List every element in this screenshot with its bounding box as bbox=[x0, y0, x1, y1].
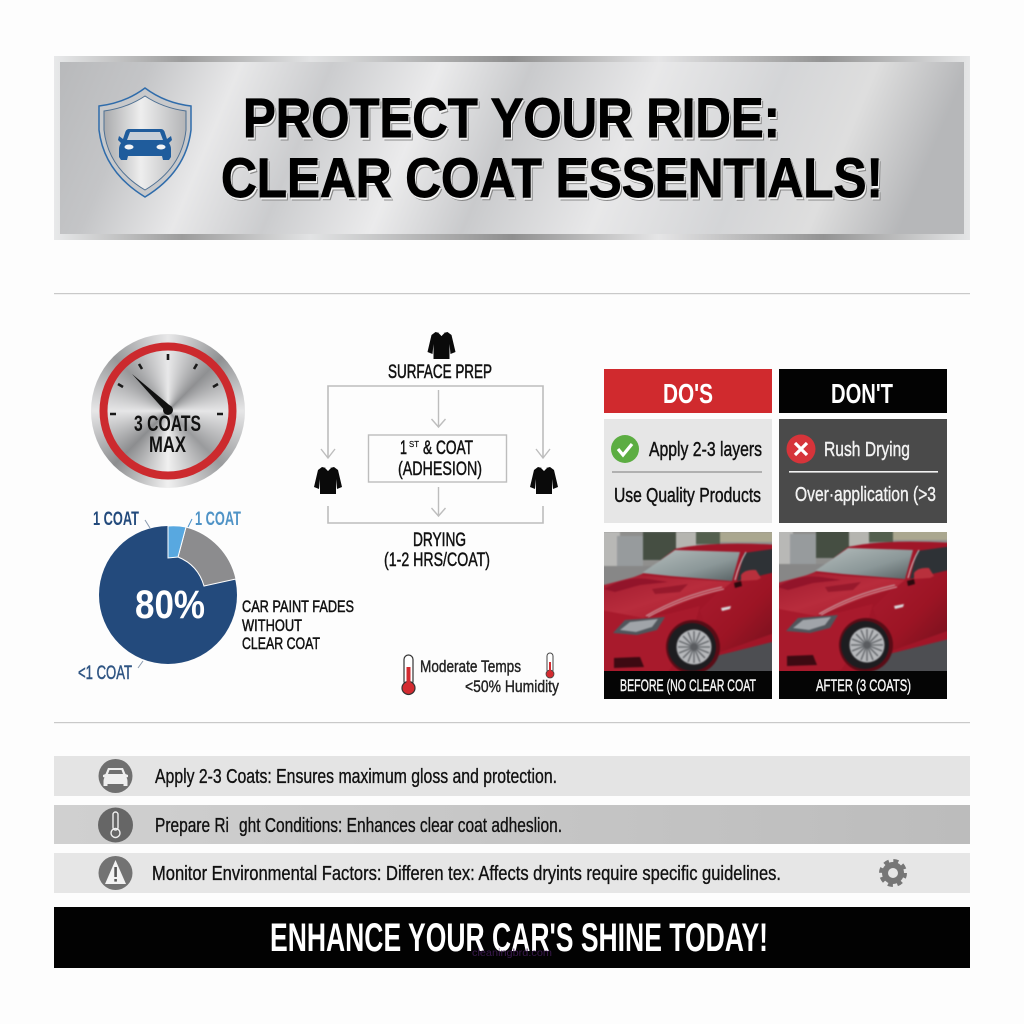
caption: before: BEFORE (NO CLEAR COAT bbox=[620, 677, 756, 695]
label: 1 coat light blue bbox=[188, 509, 241, 530]
pie caption: CAR PAINT FADES bbox=[242, 597, 354, 616]
step: first coat box bbox=[368, 435, 506, 482]
gauge: 3 coats max bbox=[91, 334, 245, 488]
tip row 1 bbox=[54, 756, 970, 796]
slice: light blue bbox=[168, 526, 186, 558]
icon: left shirt bbox=[314, 467, 342, 494]
pie caption bbox=[242, 597, 354, 653]
step: drying: DRYING bbox=[413, 530, 466, 551]
heading: do's bbox=[604, 369, 772, 413]
heading: do's: DO'S bbox=[663, 378, 713, 409]
gauge: 3 coats max: MAX bbox=[149, 432, 186, 457]
icon: warning bbox=[98, 856, 132, 890]
label: 1 coat light blue: 1 COAT bbox=[195, 509, 241, 530]
icon: top shirt bbox=[428, 332, 456, 359]
slice: gray bbox=[178, 527, 236, 586]
call to action banner bbox=[54, 907, 970, 968]
panel: do's: Use Quality Products bbox=[614, 485, 761, 507]
tip row 2 bbox=[54, 805, 970, 844]
pie caption: CLEAR COAT bbox=[242, 634, 320, 653]
step: first coat box: (ADHESION) bbox=[398, 459, 482, 480]
panel: do's bbox=[604, 369, 772, 523]
heading: don't: DON'T bbox=[831, 378, 893, 409]
step: surface prep: SURFACE PREP bbox=[388, 362, 492, 383]
heading: don't bbox=[779, 369, 947, 413]
title text: CLEAR COAT ESSENTIALS! bbox=[221, 146, 883, 209]
step: first coat box: 1 bbox=[400, 438, 407, 459]
tip text bbox=[155, 815, 562, 837]
title text: PROTECT YOUR RIDE: bbox=[243, 86, 780, 149]
tip row 1: Apply 2-3 Coats: Ensures maximum gloss and protection. bbox=[155, 766, 557, 788]
conditions note: <50% Humidity bbox=[465, 677, 559, 696]
step: first coat box: ST bbox=[409, 440, 419, 449]
icon: gear bbox=[881, 861, 905, 885]
icon: car bbox=[98, 759, 132, 793]
tip row 3: Monitor Environmental Factors: Differen tex: Affects dryints require specific guidelines. bbox=[152, 863, 781, 885]
call to action banner: ENHANCE YOUR CAR'S SHINE TODAY! bbox=[270, 916, 768, 960]
flow connectors bbox=[321, 386, 550, 523]
icon: red cross bbox=[786, 434, 816, 464]
conditions note bbox=[402, 653, 559, 696]
conditions note: Moderate Temps bbox=[420, 657, 521, 676]
pie caption: WITHOUT bbox=[242, 616, 302, 635]
step: drying bbox=[384, 530, 490, 571]
caption: after bbox=[779, 671, 947, 699]
flow diagram: application process bbox=[314, 332, 558, 571]
caption: after: AFTER (3 COATS) bbox=[816, 677, 911, 695]
label: 1 coat navy: 1 COAT bbox=[93, 509, 139, 530]
panel: don't: Rush Drying bbox=[824, 438, 910, 461]
step: first coat box: & COAT bbox=[423, 438, 473, 459]
icon: shield with car bbox=[99, 88, 191, 197]
gauge: 3 coats max: 3 COATS bbox=[134, 411, 201, 436]
label: under 1 coat: <1 COAT bbox=[78, 663, 132, 684]
icon: thermometer bbox=[98, 808, 133, 842]
pie chart: 80% paint fade bbox=[78, 509, 241, 684]
icon: right shirt bbox=[530, 467, 558, 494]
step: drying: (1-2 HRS/COAT) bbox=[384, 550, 490, 571]
icon: green check bbox=[611, 435, 639, 463]
icon: left thermometer bbox=[402, 655, 415, 694]
title text bbox=[221, 86, 883, 209]
icon: right thermometer bbox=[546, 653, 554, 678]
panel: do's: Apply 2-3 layers bbox=[649, 438, 762, 461]
caption: before bbox=[604, 671, 772, 699]
title banner bbox=[54, 56, 970, 240]
photo: before bbox=[604, 532, 772, 699]
tip row 3 bbox=[54, 853, 970, 893]
tip text: Prepare Ri bbox=[155, 815, 229, 837]
tip text: ght Conditions: Enhances clear coat adheslion. bbox=[239, 815, 562, 837]
photo: after bbox=[779, 532, 947, 699]
value: 80%: 80% bbox=[135, 583, 205, 627]
watermark: cleaningbrd.com bbox=[472, 948, 552, 959]
panel: don't: Over·application (>3 bbox=[795, 484, 936, 506]
panel: don't bbox=[779, 369, 947, 523]
